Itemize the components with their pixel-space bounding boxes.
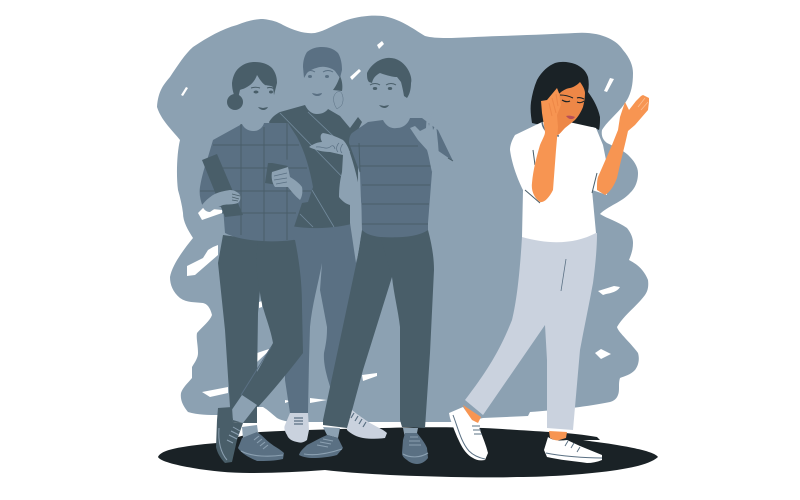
dark hair behind ear bbox=[333, 76, 342, 91]
cup lid bbox=[267, 157, 290, 166]
shirt stripes bbox=[350, 146, 432, 224]
mouth bbox=[379, 105, 389, 108]
shirt stripes bbox=[280, 112, 350, 227]
hair bbox=[367, 58, 411, 98]
figure: right man bbox=[299, 58, 453, 464]
upper sock bbox=[231, 395, 257, 423]
right shoe bbox=[345, 410, 387, 439]
hair bbox=[531, 62, 600, 130]
shirt bbox=[200, 123, 313, 241]
figure: woman walking away bbox=[449, 62, 649, 463]
finger lines right bbox=[638, 98, 648, 110]
left brow and eye bbox=[560, 95, 573, 102]
right shoe bbox=[402, 433, 428, 464]
coffee cup bbox=[265, 163, 288, 186]
leg highlight bbox=[241, 347, 271, 395]
hair bbox=[303, 47, 342, 78]
lips bbox=[566, 116, 575, 119]
pointing arm and hand bbox=[309, 133, 362, 263]
left shoe bbox=[299, 435, 343, 458]
pants fold bbox=[561, 259, 566, 291]
left leg bbox=[323, 230, 410, 428]
shirt bbox=[269, 105, 362, 228]
lower sock bbox=[242, 425, 258, 438]
right leg bbox=[380, 230, 434, 428]
sleeve seam bbox=[359, 143, 360, 172]
mouth bbox=[312, 93, 322, 96]
collar bbox=[542, 122, 559, 136]
brows and eyes bbox=[370, 84, 396, 85]
sleeve tip bbox=[448, 158, 453, 161]
left shoe bbox=[284, 413, 309, 443]
folder bbox=[202, 154, 243, 217]
shirt grid bbox=[200, 123, 312, 241]
ground shadow bbox=[158, 427, 658, 477]
cup hand bbox=[272, 167, 302, 200]
background blob bbox=[157, 16, 648, 422]
hair bbox=[232, 62, 277, 102]
phone hand bbox=[334, 92, 343, 109]
left arm and hand bbox=[202, 190, 240, 212]
mouth bbox=[258, 107, 268, 110]
finger lines bbox=[549, 94, 558, 116]
left sock bbox=[323, 427, 340, 438]
neck and face bbox=[548, 82, 585, 135]
right brow and eye bbox=[577, 98, 584, 103]
shirt folds bbox=[525, 150, 597, 203]
figure: left woman bbox=[200, 62, 313, 463]
finger lines bbox=[316, 143, 343, 153]
brows and eyes bbox=[306, 70, 333, 72]
pants bbox=[465, 233, 597, 430]
flat shoe bbox=[238, 432, 284, 461]
front shoe bbox=[544, 437, 602, 463]
shirt bbox=[510, 120, 607, 242]
ankle socks bbox=[463, 405, 567, 441]
cup fingers bbox=[274, 173, 287, 184]
tilted shoe bbox=[216, 407, 243, 463]
waving hand and arm bbox=[410, 112, 440, 172]
brows and eyes bbox=[251, 87, 274, 89]
right sock bbox=[403, 428, 418, 438]
back shoe bbox=[449, 407, 488, 460]
white streaks bbox=[181, 41, 620, 403]
back leg bbox=[218, 235, 262, 423]
fingers bbox=[232, 194, 240, 201]
bun bbox=[227, 94, 243, 110]
shirt bbox=[349, 118, 453, 237]
front leg bbox=[242, 238, 303, 407]
raised left arm and hand bbox=[532, 88, 561, 202]
raised right arm and hand bbox=[597, 95, 649, 195]
pants bbox=[285, 222, 357, 413]
figure: middle man bbox=[269, 47, 387, 443]
